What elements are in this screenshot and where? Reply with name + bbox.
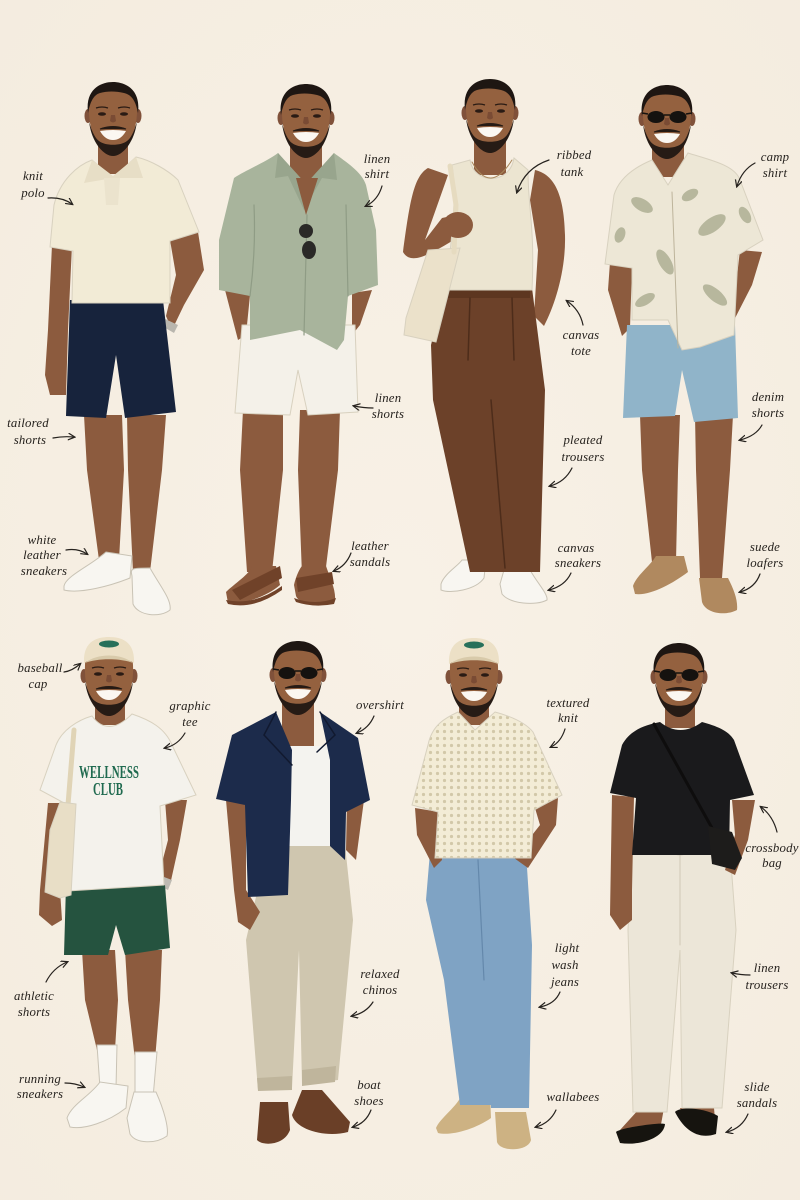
- crochet knit polo: [412, 712, 562, 858]
- label: linen shorts: shorts: [372, 407, 404, 421]
- arms: [610, 795, 755, 930]
- label: suede loafers: suede: [750, 540, 780, 554]
- label: knit polo: knit: [23, 169, 43, 183]
- label: running sneakers: [17, 1072, 84, 1101]
- label: relaxed chinos: relaxed: [360, 967, 400, 981]
- head with cap: [446, 638, 502, 717]
- suede loafers: [633, 556, 737, 613]
- figure 3: ribbed tank outfit: [403, 79, 565, 603]
- label: relaxed chinos: [352, 967, 400, 1016]
- label: relaxed chinos: chinos: [363, 983, 397, 997]
- label: textured knit: knit: [558, 711, 578, 725]
- label: camp shirt: [737, 150, 790, 186]
- label: boat shoes: shoes: [354, 1094, 384, 1108]
- label: graphic tee: graphic: [169, 699, 211, 713]
- label: linen shorts: [354, 391, 404, 421]
- arms: [39, 800, 187, 926]
- label: suede loafers: loafers: [747, 556, 783, 570]
- legs: [84, 415, 166, 572]
- label: pleated trousers: trousers: [561, 450, 605, 464]
- label: linen shirt: shirt: [365, 167, 389, 181]
- label: canvas sneakers: canvas: [558, 541, 594, 555]
- green athletic shorts: [64, 885, 170, 955]
- white socks: [97, 1045, 157, 1098]
- head with baseball cap: [80, 637, 138, 716]
- label: crossbody bag: bag: [762, 856, 782, 870]
- label: tailored shorts: [7, 416, 74, 447]
- label: ribbed tank: tank: [561, 165, 584, 179]
- label: canvas sneakers: [549, 541, 601, 590]
- arms: [403, 168, 565, 326]
- white graphic tee: [40, 714, 196, 891]
- label: linen trousers: linen: [754, 961, 780, 975]
- label: ribbed tank: [517, 148, 592, 192]
- label: canvas tote: tote: [571, 344, 591, 358]
- label: pleated trousers: pleated: [562, 433, 603, 447]
- label: athletic shorts: [14, 962, 67, 1019]
- label: running sneakers: sneakers: [17, 1087, 63, 1101]
- arms: [225, 290, 372, 340]
- label: white leather sneakers: [21, 533, 87, 578]
- label: light wash jeans: light: [555, 941, 579, 955]
- figure 6: overshirt outfit: [216, 641, 370, 1144]
- label: canvas tote: canvas: [563, 328, 599, 342]
- neck: [98, 140, 128, 174]
- cream polo: [50, 157, 199, 303]
- label: graphic tee: [165, 699, 211, 748]
- label: athletic shorts: athletic: [14, 989, 54, 1003]
- crossbody bag: [654, 724, 742, 870]
- navy overshirt: [216, 712, 370, 897]
- label: knit polo: [20, 169, 72, 204]
- label: leather sandals: sandals: [350, 555, 390, 569]
- label: linen trousers: [732, 961, 789, 992]
- head: [84, 82, 142, 156]
- white leather sneakers: [64, 552, 170, 615]
- label: overshirt: [356, 698, 404, 733]
- leather sandals: [226, 566, 336, 606]
- label: denim shorts: shorts: [752, 406, 784, 420]
- figure 5: graphic tee outfit: [39, 637, 196, 1142]
- label: graphic tee: tee: [182, 715, 198, 729]
- wallabees: [436, 1094, 531, 1149]
- figure 4: camp shirt outfit: [605, 85, 763, 613]
- label: baseball cap: cap: [28, 677, 48, 691]
- label: leather sandals: leather: [351, 539, 390, 553]
- label: light wash jeans: [540, 941, 579, 1007]
- running sneakers: [67, 1082, 167, 1142]
- label: wallabees: wallabees: [547, 1090, 599, 1104]
- label: suede loafers: [740, 540, 783, 592]
- label: linen trousers: trousers: [745, 978, 789, 992]
- label: white leather sneakers: leather: [23, 548, 62, 562]
- label: slide sandals: slide: [744, 1080, 770, 1094]
- label: textured knit: textured: [546, 696, 590, 710]
- label: leather sandals: [334, 539, 390, 571]
- label: denim shorts: [740, 390, 784, 440]
- slide sandals: [616, 1108, 718, 1144]
- tee print: WELLNESS: [79, 762, 139, 782]
- label: boat shoes: [353, 1078, 384, 1127]
- label: light wash jeans: jeans: [549, 975, 579, 989]
- figure 2: linen shirt outfit: [219, 84, 378, 606]
- label: wallabees: [536, 1090, 599, 1127]
- label: crossbody bag: crossbody: [745, 841, 799, 855]
- canvas tote: [404, 166, 460, 342]
- white tank: [288, 746, 331, 846]
- floral camp shirt: [605, 153, 763, 350]
- label: crossbody bag: [745, 807, 799, 870]
- canvas tote: [45, 730, 76, 898]
- ribbed tank: [447, 158, 533, 290]
- figure 7: textured knit outfit: [412, 638, 562, 1149]
- canvas sneakers: [441, 560, 547, 603]
- arms: [45, 232, 204, 395]
- label: running sneakers: running: [19, 1072, 61, 1086]
- hand on strap: [443, 212, 473, 238]
- light wash jeans: [426, 852, 532, 1108]
- label: knit polo: polo: [20, 186, 45, 200]
- boat shoes: [257, 1090, 350, 1144]
- label: light wash jeans: wash: [551, 958, 579, 972]
- arms: [415, 798, 558, 868]
- label: denim shorts: denim: [752, 390, 784, 404]
- label: slide sandals: [727, 1080, 777, 1132]
- white linen shorts: [235, 325, 358, 415]
- label: linen shorts: linen: [375, 391, 401, 405]
- relaxed chinos: [246, 845, 353, 1090]
- label: boat shoes: boat: [357, 1078, 381, 1092]
- label: pleated trousers: [550, 433, 605, 486]
- label: slide sandals: sandals: [737, 1096, 777, 1110]
- arms: [226, 800, 364, 930]
- label: camp shirt: camp: [761, 150, 790, 164]
- label: camp shirt: shirt: [763, 166, 787, 180]
- denim shorts: [623, 325, 738, 422]
- navy tailored shorts: [66, 300, 176, 418]
- label: baseball cap: [18, 661, 80, 691]
- label: overshirt: overshirt: [356, 698, 404, 712]
- label: canvas sneakers: sneakers: [555, 556, 601, 570]
- cream linen trousers: [628, 850, 736, 1112]
- label: tailored shorts: shorts: [14, 433, 46, 447]
- label: linen shirt: [364, 152, 390, 206]
- label: tailored shorts: tailored: [7, 416, 49, 430]
- label: white leather sneakers: white: [28, 533, 56, 547]
- label: ribbed tank: ribbed: [557, 148, 592, 162]
- pleated trousers: [431, 288, 545, 572]
- arms: [608, 250, 762, 336]
- label: linen shirt: linen: [364, 152, 390, 166]
- label: athletic shorts: shorts: [18, 1005, 50, 1019]
- black tee: [610, 722, 754, 855]
- label: canvas tote: [563, 301, 599, 358]
- legs: [82, 950, 162, 1060]
- label: baseball cap: baseball: [18, 661, 63, 675]
- sunglasses on placket: [299, 224, 316, 259]
- figure 1: knit polo outfit: [45, 82, 204, 615]
- label: white leather sneakers: sneakers: [21, 564, 67, 578]
- sage linen shirt: [219, 153, 378, 350]
- figure 8: black tee outfit: [610, 643, 755, 1144]
- tee print second line: CLUB: [93, 779, 123, 799]
- label: textured knit: [546, 696, 590, 747]
